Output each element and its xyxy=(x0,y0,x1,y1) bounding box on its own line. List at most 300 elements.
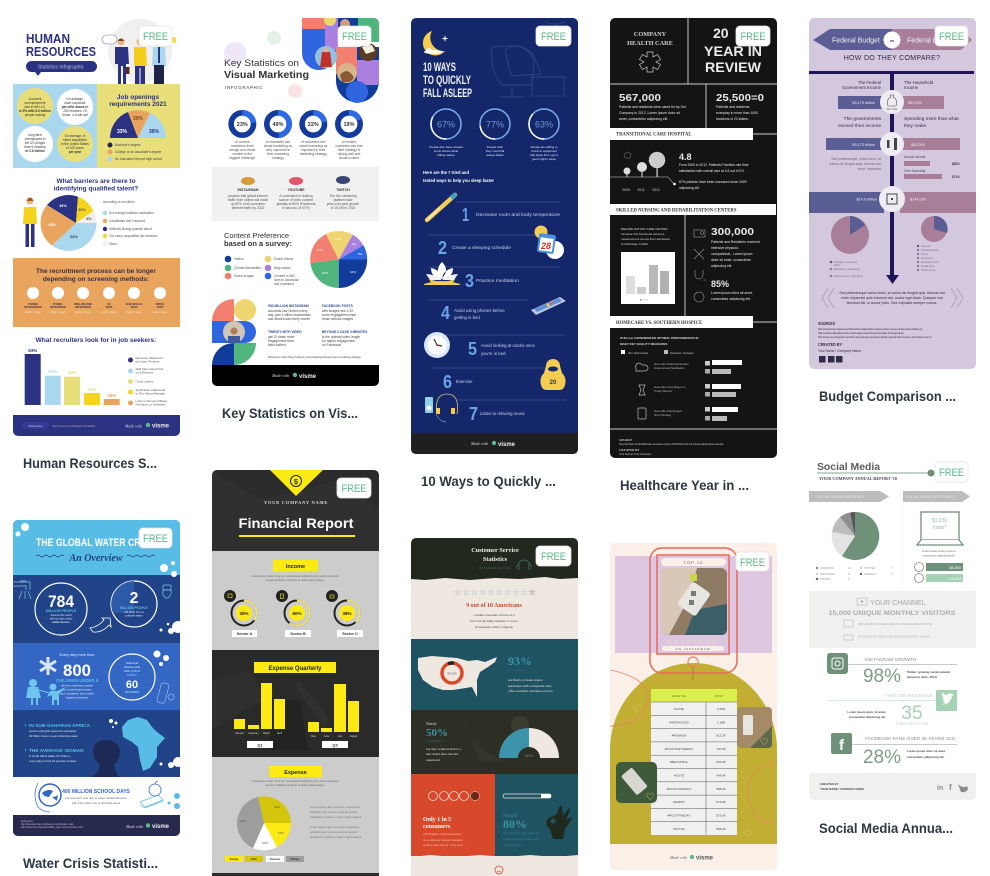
band: budget totals: $14.0 trillion xyxy=(857,198,877,202)
bar chart: rehabilitation: REHABILITATION CARE CENTER xyxy=(621,227,668,231)
section: 50% half donut: experience xyxy=(426,758,441,762)
band: budget totals xyxy=(809,186,976,213)
section: income: Income xyxy=(286,564,305,570)
section: 50% half donut: 50% xyxy=(525,753,533,758)
section: 800 children: disease kills xyxy=(124,665,141,669)
panel: key stats circles: On average, in xyxy=(65,134,86,138)
section: expense quarterly bar charts: August xyxy=(350,735,358,738)
section: income: Lorem ipsum dolor sit amet, consectetuer adipiscing elit, sed do eiusmod xyxy=(252,574,339,578)
legend: content preference: Social Images xyxy=(234,274,254,278)
laptop stat and mini bars: 13,810 xyxy=(949,576,962,581)
icon: kettlebell xyxy=(540,359,566,390)
panel: platforms: up 82% of all consumer xyxy=(231,202,266,206)
table: hashtags: 648.6K xyxy=(716,774,726,778)
section: 784 million and 2 billion: MILLION PEOPLE xyxy=(46,609,77,613)
section: 784 million and 2 billion: still not have basic xyxy=(50,616,73,620)
section: nearly 80%: as "very good" xyxy=(503,843,523,847)
section: only 1 in 5 consumers xyxy=(411,774,495,856)
stat rings: People who have at least xyxy=(429,145,463,149)
illustration: standing person xyxy=(23,198,37,247)
card caption: 10 Ways to Quickly ... xyxy=(421,473,556,489)
donut stats row: important in their xyxy=(301,148,326,152)
section: 50% half donut: say they would switch to a xyxy=(426,747,462,751)
panel: key stats circles: people looking xyxy=(25,113,46,117)
table: hashtags: 573.6K xyxy=(716,814,726,818)
comparison row: spending: $53,000 xyxy=(911,143,925,147)
panel: platforms: globally at 80% (Facebook xyxy=(277,202,316,206)
comparison bars and legend: Timely Manner xyxy=(654,389,672,393)
stat text blocks: more engagement than xyxy=(322,313,356,317)
section: 93% map: 93% xyxy=(508,654,532,668)
legend: content preference: Content in 360 xyxy=(274,274,295,278)
panel: job openings requirements: requirements 2021 xyxy=(109,101,167,108)
heading: 10 Ways to Quickly Fall Asleep xyxy=(423,62,472,97)
section: 784 million and 2 billion: 784 xyxy=(48,592,74,611)
section: expense pie chart: Sample xyxy=(230,858,239,861)
table: hashtags: #PHOTOGRAPHY xyxy=(667,787,691,791)
pie chart: content preference: 34% xyxy=(350,270,356,274)
comparison bars and legend: How often Discharged xyxy=(654,409,682,413)
comparison row: spending: $3,173 trillion xyxy=(852,143,875,147)
panel: platforms: TWITCH xyxy=(336,188,350,192)
bar chart: recruiter criteria xyxy=(25,348,120,405)
header: customer service statistics xyxy=(411,538,578,580)
free badge xyxy=(536,26,571,46)
panel: recruitment process: Adds 7 days xyxy=(50,310,66,314)
closing paragraph with chevrons: tincidunt elit, ut auctor justo. Sed vulputate semper cursus. xyxy=(847,301,937,305)
section: expense quarterly bar charts: June xyxy=(324,735,330,738)
free badge xyxy=(139,26,172,46)
comparison row: income: Income xyxy=(904,85,919,90)
heading: Human Resources: RESOURCES xyxy=(26,45,96,59)
section: income: 38% xyxy=(342,611,352,616)
comparison row: income: $53,000 xyxy=(908,101,922,105)
footer: credits and social icons xyxy=(809,773,976,800)
poster: top 10 hashtags frame: TOP 10 xyxy=(684,560,703,565)
footer: references and visme logo: References: xyxy=(21,820,34,823)
stat: facebook fans: 28% xyxy=(863,747,901,768)
section: income xyxy=(212,551,379,650)
comparison row: income xyxy=(838,80,944,114)
section: expense pie chart: incididunt ut labore et dolor magna aliqua. xyxy=(310,815,362,819)
header: financial report xyxy=(212,470,379,551)
legend: content preference xyxy=(225,256,299,286)
footer: visme logo: visme xyxy=(696,856,714,862)
stat: twitter mentions: TIMES PER HOUR xyxy=(896,722,929,726)
laptop stat and mini bars: Lorem ipsum dolor sit amet, xyxy=(922,549,956,553)
text and mini bars: enim. Imperdiet xyxy=(858,167,881,171)
heading: Key Statistics on Visual Marketing: Key Statistics on xyxy=(224,58,299,69)
illustration: geometric shapes with portrait xyxy=(212,299,256,365)
table: hashtags: 661.8K xyxy=(716,760,726,764)
source and credits: Your Name/ Your Company xyxy=(619,452,652,456)
banner: transitional care hospital xyxy=(610,128,753,140)
section: 800 children: Diarrheal xyxy=(126,661,138,665)
section: income: 35% xyxy=(239,611,249,616)
panel: key stats circles: of 100 hours xyxy=(66,146,84,150)
stat: 567,000: Company in 2012. Lorem ipsum dolor sit xyxy=(619,111,680,115)
section: expense pie chart: Revenue xyxy=(270,858,281,861)
panel: key stats circles: in the United States xyxy=(61,142,89,146)
legend: recruiter criteria: Resumes Tailored to xyxy=(136,356,163,360)
panel: key stats circles: 250 resumes. Of xyxy=(63,109,87,113)
section: 800 children: CHILDREN UNDER 5 xyxy=(56,678,99,683)
hearts xyxy=(633,704,769,840)
header left: company name xyxy=(627,31,673,72)
footer: visme logo xyxy=(669,855,714,862)
panel: recruitment process: The recruitment process can be longer xyxy=(36,268,156,275)
icon: thermometer xyxy=(427,194,456,220)
panel: platforms: INSTAGRAM xyxy=(238,188,259,192)
divider lines and numbered steps: 5 xyxy=(468,339,477,359)
stat: twitter mentions: TWITTER MENTIONS xyxy=(885,693,933,699)
banner: homecare vs southern hospice xyxy=(610,316,753,328)
legend: barriers: Not enough suitable candidates xyxy=(109,211,154,215)
stat rings: 77% xyxy=(486,120,504,130)
panel: recruitment process: depending on screening methods: xyxy=(43,276,149,283)
card: Customer Service Statistics xyxy=(411,538,578,876)
legend: recruiter criteria: Cover Letters xyxy=(136,380,154,384)
stats: 300,000 and 85% with icons: consectetur adipiscing elit. xyxy=(711,297,751,301)
section: nearly 80% xyxy=(495,774,578,856)
free badge xyxy=(139,528,172,548)
illustration: growth trees timeline xyxy=(610,152,676,192)
comparison row: income: Government Income xyxy=(842,85,882,90)
closing paragraph with chevrons xyxy=(822,288,963,308)
divider lines and numbered steps xyxy=(428,202,566,424)
stats: 300,000 and 85% with icons: adipiscing elit. xyxy=(711,264,732,268)
section: school days: 400 MILLION SCHOOL DAYS xyxy=(62,789,131,795)
donut stats row: visual content xyxy=(339,156,359,160)
donut stats row: of content xyxy=(342,140,356,144)
free badge: FREE xyxy=(541,31,566,43)
hearts: ♡ xyxy=(760,737,769,748)
divider lines and numbered steps: Decrease room and body temperature xyxy=(476,212,561,217)
heading: Human Resources xyxy=(26,34,96,56)
section: expense pie chart: Expense xyxy=(284,770,307,776)
footer: references and visme logo: https://zety.com/blog/hr-statistics xyxy=(52,424,96,428)
stat text blocks: is the optimal video length xyxy=(322,335,360,339)
panel: job openings requirements: 36% xyxy=(149,129,160,135)
divider lines and numbered steps: 2 xyxy=(438,238,447,258)
header: customer service statistics: IN SHADE IN 2021 xyxy=(479,566,511,570)
section: sub-saharan africa: IN SUB-SAHARAN AFRICA xyxy=(29,723,91,729)
section: 800 children: 800 xyxy=(63,661,91,680)
section: 784 million and 2 billion: water access xyxy=(51,620,70,624)
banner: skilled nursing: SKILLED NURSING AND REHABILITATION CENTERS xyxy=(616,208,737,214)
free badge xyxy=(736,26,770,46)
stat rings: 63% xyxy=(535,120,553,130)
free badge xyxy=(536,546,571,566)
stat text blocks: BEYOND 2 CASE 3 MINUTES xyxy=(322,330,368,334)
stat text blocks: day, and 4 million businesses xyxy=(268,313,311,317)
section: income: Sector A xyxy=(237,632,252,636)
legend: content preference: and explained xyxy=(274,282,294,286)
text and mini bars: Annual Income xyxy=(904,155,925,159)
stat text blocks: 500 MILLION INSTAGRAM xyxy=(268,304,309,308)
heading: social media: Social Media xyxy=(817,462,880,473)
stat text blocks: with images see 2.3X xyxy=(322,309,354,313)
panel: platforms: year-over-year growth xyxy=(327,202,359,206)
pie chart: content preference: 17% xyxy=(317,248,323,252)
section: 50% half donut: Nearly xyxy=(426,721,437,726)
text and mini bars: $88% xyxy=(952,162,960,166)
stat: instagram growth: INSTAGRAM GROWTH xyxy=(865,657,917,663)
footer: visme logo: visme xyxy=(498,442,516,448)
footer: references and visme logo: http://thewaterproject.org/water-scarcity/water_stats xyxy=(21,823,74,826)
header arrows: federal budget vs household: vs xyxy=(890,38,895,43)
section: 93% map: 93.10% xyxy=(447,672,457,676)
heading: barriers xyxy=(54,178,138,192)
section: 784 million and 2 billion: polluted water xyxy=(125,614,143,618)
free badge: FREE xyxy=(939,467,964,479)
donut stats row: marketers think xyxy=(231,144,254,148)
pie chart: barriers xyxy=(41,195,96,251)
section: nearly 80%: if they rate the service team xyxy=(503,837,539,841)
free badge: FREE xyxy=(740,557,765,569)
section: only 1 in 5 consumers: at a company whose customer xyxy=(423,838,464,842)
panel: your channel: 30 HOURS OF VIDEO ARE UPLOADED EVERY MINUTE xyxy=(858,634,930,638)
section: school days: with 272 million lost to diarrheal alone xyxy=(72,801,120,805)
legend: recruiter criteria: Application Addressed xyxy=(136,388,166,392)
section: expense quarterly bar charts: May xyxy=(311,735,317,738)
free badge xyxy=(935,462,968,482)
panel: your channel: 400 HOURS OF VIDEO ARE UPLOADED EVERY MINUTE xyxy=(858,622,932,626)
stat rings xyxy=(429,109,559,161)
stat: 4.8 rating: adipiscing elit. xyxy=(679,186,700,190)
stat: 25,500: everyday in more than 1000 xyxy=(716,111,758,115)
comparison row: spending: they make xyxy=(904,123,926,129)
pie chart: referrals xyxy=(816,512,893,581)
panel: recruitment process: Adds 7 days xyxy=(101,310,117,314)
heading: content preference: based on a survey: xyxy=(224,239,292,248)
closing paragraph with chevrons: Sed pellentesque varius tortor, at varius dic feugiat quis. Aenean est xyxy=(839,291,945,295)
section: 93% map xyxy=(411,639,578,710)
panel: your channel xyxy=(809,591,976,648)
section: expense quarterly bar charts xyxy=(212,650,379,757)
legend: barriers xyxy=(103,200,158,246)
panel: job openings requirements: College or an associate's degree xyxy=(115,150,162,154)
stat: 25,500: locations in 23 states. xyxy=(716,117,749,121)
donut stats row xyxy=(229,113,363,160)
header arrows: federal budget vs household: Federal Budget xyxy=(832,38,880,44)
donut stats row: 49% xyxy=(272,122,284,128)
free badge: FREE xyxy=(143,533,168,545)
laptop stat and mini bars: $1,230 xyxy=(932,518,947,524)
header arrows: federal budget vs household xyxy=(813,29,972,50)
section: 800 children: by contaminated water, xyxy=(62,688,92,692)
stat text blocks: Reference: https://blog.hubspot.com/marketing/visual-content-marketing-strategy xyxy=(268,355,362,359)
pie chart: referrals: 7 xyxy=(891,567,893,570)
divider lines and numbered steps: Avoid using phones before xyxy=(454,308,505,313)
stats: 300,000 and 85% with icons: 85% xyxy=(711,279,729,289)
section: 800 children: SECONDS xyxy=(125,690,139,694)
header right: year in review: 20 xyxy=(713,25,729,41)
structure lines xyxy=(610,18,777,429)
sources and credits xyxy=(818,321,932,362)
central timeline arrow xyxy=(809,71,974,284)
icon: calendar with sun and moon xyxy=(534,226,564,259)
stat: 567,000: 567,000 xyxy=(619,93,661,104)
section: 800 children: die from diarrhea caused xyxy=(61,684,93,688)
section: expense pie chart: 10% xyxy=(262,841,268,845)
icon: lotus xyxy=(424,262,460,285)
banner: homecare vs southern hospice: HOMECARE VS. SOUTHERN HOSPICE xyxy=(616,321,702,326)
card: Top 10 Hashtags on Instagram xyxy=(610,543,777,870)
table: hashtags: #FASHION xyxy=(672,734,686,738)
panel: key stats circles: than 6 months) xyxy=(24,145,46,149)
card caption: Budget Comparison ... xyxy=(819,388,956,404)
table: hashtags: 585.6K xyxy=(716,787,726,791)
header: the global water crisis: THE GLOBAL WATER CRISIS xyxy=(36,537,157,549)
panel: platforms: projects that global internet xyxy=(228,194,268,198)
free badge: FREE xyxy=(939,31,964,43)
legend: recruiter criteria: Skill Sets Listed First xyxy=(136,367,164,371)
stats: 300,000 and 85% with icons: dolor sit amet, consectetur xyxy=(711,258,752,262)
pie chart: content preference: 6% xyxy=(352,242,356,246)
panel: platforms: source of video content xyxy=(279,198,313,202)
heading: social media xyxy=(817,462,934,481)
heading: barriers: What barriers are there to xyxy=(56,178,136,185)
poster: top 10 hashtags frame xyxy=(650,548,737,673)
panel: recruitment process: PHONE xyxy=(28,302,38,306)
hearts: ♡ xyxy=(646,792,655,803)
footer: visme logo xyxy=(411,433,578,454)
section: only 1 in 5 consumers: service they rate as "very poor" xyxy=(423,843,465,847)
pie chart: barriers: 8% xyxy=(86,217,92,221)
stat rings: People wish xyxy=(487,145,503,149)
section: 800 children: 60 xyxy=(126,679,138,691)
icon: clock xyxy=(424,332,450,358)
legend: content preference: form to download xyxy=(274,278,299,282)
header left: company name: HEALTH CARE xyxy=(627,40,673,47)
divider lines and numbered steps: Listen to relaxing music xyxy=(480,411,526,416)
divider lines and numbered steps: 7 xyxy=(469,404,478,424)
section: school days xyxy=(13,777,180,815)
header: customer service statistics: Customer Service xyxy=(471,547,519,554)
divider lines and numbered steps: getting in bed xyxy=(454,315,480,320)
subtitle pill xyxy=(26,61,97,76)
footer: visme logo: Made with xyxy=(271,373,289,378)
comparison row: spending: The governments xyxy=(844,116,882,122)
section: expense pie chart xyxy=(212,757,379,873)
legend: content preference: (Cinder/Newsletter) xyxy=(234,266,261,270)
legend: recruiter criteria xyxy=(128,356,168,406)
donut stats row: marketing strategy xyxy=(300,152,327,156)
panel: recruitment process: DRUG xyxy=(156,302,164,306)
free badge xyxy=(935,26,968,46)
pie chart: household: Entertainment xyxy=(921,260,939,264)
stat: 567,000: amet, consectetur adipiscing elit. xyxy=(619,117,668,121)
card caption: Social Media Annua... xyxy=(819,820,953,836)
section: expense pie chart: adipiscing elit, sed do eiusmod tempor xyxy=(310,830,358,834)
bar chart: recruiter criteria: 40% xyxy=(67,370,77,375)
stats: 300,000 and 85% with icons xyxy=(694,227,760,302)
panel: recruitment process: Adds 7 days xyxy=(152,310,168,314)
comparison row: income: $3,173 trillion xyxy=(852,101,875,105)
source and credits: CREATED BY xyxy=(619,448,640,452)
table: hashtags: #PHOTOOFTHEDAY xyxy=(665,747,693,751)
pie chart: referrals: 11 xyxy=(848,573,851,576)
section: expense quarterly bar charts: February xyxy=(248,732,259,735)
decorative curves xyxy=(610,657,777,823)
table: hashtags: 573.6K xyxy=(716,800,726,804)
footer: visme logo: visme xyxy=(299,374,317,380)
heading: content preference xyxy=(224,232,292,248)
section: 93% map: are likely to make repeat xyxy=(508,678,543,682)
bar chart: recruiter criteria: 63% xyxy=(28,348,37,353)
panel: job openings requirements xyxy=(97,84,180,168)
panel: recruitment process: PANEL xyxy=(53,302,63,306)
section: sub-saharan africa: 40 billion hours a year collecting water xyxy=(29,734,78,738)
donut stats row: 23% xyxy=(237,122,248,128)
pie chart: content preference: 5% xyxy=(358,252,362,256)
stat: 4.8 rating: From 2009 to 2012, Patients/ Families rate their xyxy=(679,163,750,167)
banner: transitional care hospital: TRANSITIONAL CARE HOSPITAL xyxy=(616,132,691,138)
divider lines and numbered steps: 1 xyxy=(462,205,469,225)
stat: instagram growth: (tenant to June, 2014) xyxy=(907,675,937,679)
pie chart: federal xyxy=(830,216,869,278)
section: 50% half donut: 50% xyxy=(426,727,448,739)
section: sub-saharan africa: THE AVERAGE WOMAN xyxy=(29,748,84,754)
bar chart: rehabilitation xyxy=(621,227,675,304)
card: Key Statistics on Visual Marketing xyxy=(212,14,379,421)
legend: recruiter criteria: to The Hiring Manager xyxy=(136,392,165,396)
table: hashtags: HASHTAG xyxy=(672,694,687,698)
panel: recruitment process: JOB SKILLS xyxy=(126,302,142,306)
stat: 567,000 xyxy=(619,93,687,121)
stat: instagram growth: Twitter: growing social network xyxy=(907,670,951,674)
footer: credits and social icons: YOUR NAME / COMPANY NAME xyxy=(820,787,864,791)
laptop stat and mini bars xyxy=(914,512,963,582)
legend: content preference: Social Videos xyxy=(274,257,294,261)
sources and credits: CREATED BY xyxy=(818,342,842,347)
stat: twitter mentions: consectetur adipiscing elit. xyxy=(849,715,886,719)
heading: what recruiters look for: What recruiters look for in job seekers: xyxy=(36,337,156,344)
stats: 300,000 and 85% with icons: intensive physical, xyxy=(711,246,739,250)
hearts: ♡ xyxy=(743,829,752,840)
table: hashtags: 565.2K xyxy=(716,827,726,831)
banner: skilled nursing xyxy=(610,204,776,215)
stat text blocks: on Facebook xyxy=(322,343,341,347)
text and mini bars: $73% xyxy=(952,175,960,179)
band: budget totals: $144,000 xyxy=(910,198,926,202)
section: 800 children: Every day more than xyxy=(59,653,95,657)
stat: 25,500 xyxy=(716,93,764,121)
intro text: tested ways to help you sleep faster xyxy=(423,178,494,183)
panel: platforms: in second, at 67%) xyxy=(282,206,310,210)
table: hashtags: #HAPPY xyxy=(673,800,685,804)
stat: 25,500: Patients and residents xyxy=(716,105,750,109)
stat: 4.8 rating: 4.8 xyxy=(679,152,692,162)
section: income: tempor incididunt ut labore et dolor magna aliqua. xyxy=(265,578,325,582)
section: 93% map: purchases with companies who xyxy=(508,684,552,688)
panel: job openings requirements: Bachelor's degree xyxy=(115,143,141,147)
header arrows: federal budget vs household: Federal Budget xyxy=(907,38,955,44)
panel: your channel: YOUR CHANNEL xyxy=(870,600,926,607)
panel: platforms: The live-streaming xyxy=(329,194,357,198)
panel: recruitment process: INTERVIEW xyxy=(50,305,66,309)
comparison bars and legend: Our HomeCare xyxy=(628,351,649,355)
legend: barriers: Difficulty finding passive talent xyxy=(109,227,152,231)
pie chart: referrals: FACEBOOK xyxy=(820,567,834,570)
footer: references and visme logo: Made with xyxy=(125,824,143,829)
card: Social Media Annual Report xyxy=(809,450,976,836)
photo: phone on wood xyxy=(737,707,772,748)
stat: 25,500: 25,500=0 xyxy=(716,93,764,104)
panel: your channel: 15,000 UNIQUE MONTHLY VISITORS xyxy=(828,610,956,617)
stat rings: People are willing to xyxy=(531,145,558,149)
